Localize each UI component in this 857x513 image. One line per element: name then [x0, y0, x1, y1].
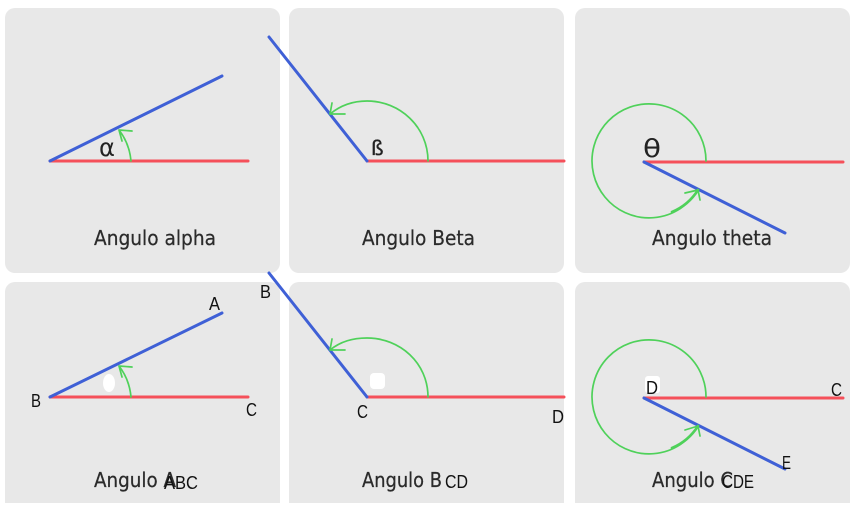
symbol beta: ß — [371, 136, 384, 160]
arc arrow theta — [592, 104, 706, 218]
point labels ABC — [31, 294, 257, 420]
panel: angulo BCD — [260, 273, 564, 503]
arc arrow beta — [330, 101, 428, 161]
point labels BCD: D — [552, 407, 564, 427]
heading: angulo BCD: Angulo B — [362, 468, 442, 492]
erased symbol CDE — [645, 376, 660, 393]
panel: angulo theta — [575, 8, 850, 273]
point labels CDE — [646, 378, 842, 473]
symbol alpha: α — [99, 133, 115, 162]
heading: angulo ABC: ABC — [164, 473, 198, 493]
angle rays theta — [644, 162, 843, 233]
point labels CDE: C — [831, 380, 842, 400]
angle rays ABC — [50, 313, 248, 397]
point labels ABC: A — [209, 294, 220, 314]
arc arrow CDE — [592, 340, 706, 454]
angle rays alpha — [50, 76, 248, 161]
panel: angulo CDE — [575, 282, 850, 503]
arc arrow BCD — [330, 338, 428, 397]
panel: angulo ABC — [5, 282, 280, 503]
point labels ABC: B — [31, 391, 41, 411]
angle rays beta — [269, 37, 564, 161]
arc arrow alpha — [119, 130, 132, 161]
heading: angulo beta: Angulo Beta — [362, 226, 475, 250]
arc arrow ABC — [119, 366, 132, 397]
heading: angulo CDE: CDE — [722, 472, 754, 492]
symbol theta: θ — [643, 134, 661, 163]
point labels BCD: C — [357, 402, 368, 422]
heading: angulo alpha: Angulo alpha — [94, 226, 216, 250]
angle rays CDE — [644, 398, 843, 469]
heading: angulo CDE: Angulo C — [652, 468, 733, 492]
heading: angulo theta: Angulo theta — [652, 226, 772, 250]
point labels CDE: D — [646, 378, 658, 398]
point labels ABC: C — [246, 400, 257, 420]
panel: angulo alpha — [5, 8, 280, 273]
heading: angulo ABC: Angulo A — [94, 468, 176, 492]
angle rays BCD — [269, 273, 564, 397]
panel: angulo beta — [269, 8, 564, 273]
point labels CDE: E — [782, 453, 791, 473]
erased symbol BCD — [370, 373, 385, 389]
point labels BCD — [260, 282, 564, 427]
heading: angulo BCD: CD — [445, 472, 468, 492]
point labels BCD: B — [260, 282, 271, 302]
erased symbol ABC — [103, 374, 115, 392]
